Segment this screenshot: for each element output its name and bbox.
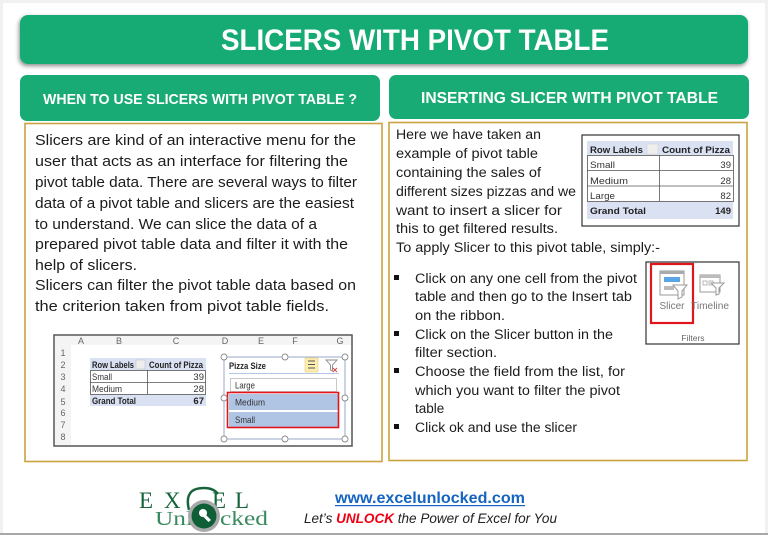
- pivot table: full: 149: [715, 206, 731, 217]
- logo: excel unlocked: E: [139, 488, 153, 513]
- icon: padlock: [188, 500, 220, 532]
- heading: when to use slicers: WHEN TO USE SLICERS WITH PIVOT TABLE ?: [43, 91, 357, 108]
- excel screenshot: filtered pivot table and slicer: 7: [60, 420, 66, 430]
- pivot table: full: 39: [720, 160, 731, 171]
- pivot table: filtered: Medium: [92, 384, 122, 395]
- pivot table: filtered: 39: [193, 372, 204, 383]
- pivot table: filtered: Row Labels: [92, 360, 134, 371]
- text block: explanation: Slicers are kind of an interactive menu for the: [35, 132, 356, 149]
- slicer: pizza size: Pizza Size: [229, 361, 266, 372]
- bullet list: steps: table and then go to the Insert tab: [415, 289, 632, 304]
- icon: clear filter: [326, 360, 337, 372]
- pivot table: full: Large: [590, 191, 615, 202]
- text block: explanation: [35, 132, 357, 315]
- ribbon screenshot: filters group: Filters: [681, 333, 705, 343]
- logo: excel unlocked: cked: [220, 508, 268, 530]
- heading: when to use slicers: [20, 75, 380, 121]
- excel screenshot: filtered pivot table and slicer: 2: [60, 360, 66, 370]
- pivot table: full: 28: [720, 176, 731, 187]
- icon: slicer: [660, 271, 687, 299]
- text block: intro: example of pivot table: [396, 146, 538, 161]
- pivot table: filtered: Count of Pizza: [149, 360, 204, 371]
- panel: when to use slicers: [25, 124, 382, 462]
- logo: excel unlocked: [139, 488, 268, 532]
- excel screenshot: filtered pivot table and slicer: 4: [60, 384, 66, 394]
- text block: intro: To apply Slicer to this pivot table, simply:-: [396, 240, 660, 255]
- excel screenshot: filtered pivot table and slicer: F: [292, 336, 298, 346]
- pivot table: full: Medium: [590, 176, 628, 187]
- panel: inserting slicer: [389, 122, 747, 460]
- bullet list: steps: filter section.: [415, 345, 497, 360]
- ribbon screenshot: filters group: Timeline: [691, 301, 729, 312]
- bullet list: steps: table: [415, 401, 444, 416]
- text block: intro: different sizes pizzas and we: [396, 184, 576, 199]
- text block: intro: want to insert a slicer for: [395, 203, 563, 218]
- pivot table: full: Count of Pizza: [662, 145, 731, 156]
- pivot table: filtered: Small: [92, 372, 112, 383]
- excel screenshot: filtered pivot table and slicer: [54, 335, 352, 446]
- excel screenshot: filtered pivot table and slicer: 1: [60, 348, 66, 358]
- excel screenshot: filtered pivot table and slicer: C: [173, 336, 180, 346]
- text block: explanation: Slicers can filter the pivot table data based on: [35, 277, 356, 294]
- title banner: [20, 15, 748, 64]
- text block: intro: this to get filtered results.: [396, 221, 558, 236]
- bullet list: steps: Choose the field from the list, for: [415, 364, 626, 379]
- logo: excel unlocked: E: [212, 488, 226, 513]
- bullet list: steps: which you want to filter the pivot: [414, 383, 620, 398]
- heading: inserting slicer: INSERTING SLICER WITH PIVOT TABLE: [421, 90, 718, 107]
- text block: explanation: pivot table data. There are several ways to filter: [35, 174, 357, 191]
- pivot table: full: [582, 135, 739, 226]
- logo: excel unlocked: L: [235, 488, 249, 513]
- tagline: Let’s UNLOCK the Power of Excel for You: [304, 510, 557, 526]
- logo: excel unlocked: Unl: [155, 508, 194, 530]
- bullet list: steps: Click ok and use the slicer: [415, 420, 578, 435]
- text block: explanation: prepared pivot table data and filter it with the: [35, 236, 348, 253]
- pivot table: filtered: 28: [193, 384, 204, 395]
- excel screenshot: filtered pivot table and slicer: G: [336, 336, 344, 346]
- slicer: pizza size: Medium: [235, 398, 265, 408]
- excel screenshot: filtered pivot table and slicer: D: [222, 336, 229, 346]
- logo: excel unlocked: X: [164, 488, 181, 513]
- excel screenshot: filtered pivot table and slicer: 6: [60, 408, 66, 418]
- website link: www.excelunlocked.com: [334, 490, 525, 507]
- ribbon screenshot: filters group: Slicer: [659, 301, 685, 312]
- excel screenshot: filtered pivot table and slicer: 3: [60, 372, 66, 382]
- excel screenshot: filtered pivot table and slicer: 8: [60, 432, 66, 442]
- text block: explanation: data of a pivot table and slicers are the easiest: [35, 195, 355, 212]
- slicer: pizza size: Small: [235, 415, 255, 426]
- icon: multi-select: [305, 358, 318, 372]
- text block: explanation: to understand. We can slice the data of a: [35, 216, 318, 233]
- icon: timeline: [700, 275, 724, 295]
- bullet list: steps: on the ribbon.: [415, 308, 505, 323]
- text block: explanation: help of slicers.: [35, 257, 137, 274]
- heading: inserting slicer: [389, 75, 749, 119]
- slicer: pizza size: Large: [235, 380, 255, 392]
- text block: intro: containing the sales of: [396, 165, 541, 180]
- bullet list: steps: Click on the Slicer button in the: [415, 327, 613, 342]
- pivot table: full: Row Labels: [590, 145, 643, 156]
- pivot table: filtered: 67: [193, 396, 204, 407]
- slicer: pizza size: [221, 354, 348, 442]
- excel screenshot: filtered pivot table and slicer: B: [116, 336, 122, 346]
- text block: explanation: the criterion taken from pivot table fields.: [35, 298, 329, 315]
- title banner: SLICERS WITH PIVOT TABLE: [221, 24, 609, 57]
- bullet list: steps: [394, 271, 637, 435]
- ribbon screenshot: filters group: [646, 262, 739, 344]
- excel screenshot: filtered pivot table and slicer: A: [78, 336, 84, 346]
- pivot table: full: 82: [720, 191, 731, 202]
- pivot table: full: Grand Total: [590, 206, 646, 217]
- text block: intro: [395, 127, 660, 255]
- pivot table: filtered: Grand Total: [92, 396, 136, 407]
- pivot table: full: Small: [590, 160, 615, 171]
- text block: explanation: user that acts as an interface for filtering the: [35, 153, 348, 170]
- excel screenshot: filtered pivot table and slicer: E: [258, 336, 264, 346]
- text block: intro: Here we have taken an: [396, 127, 541, 142]
- bullet list: steps: Click on any one cell from the pivot: [415, 271, 637, 286]
- pivot table: filtered: [90, 358, 206, 407]
- excel screenshot: filtered pivot table and slicer: 5: [60, 397, 66, 407]
